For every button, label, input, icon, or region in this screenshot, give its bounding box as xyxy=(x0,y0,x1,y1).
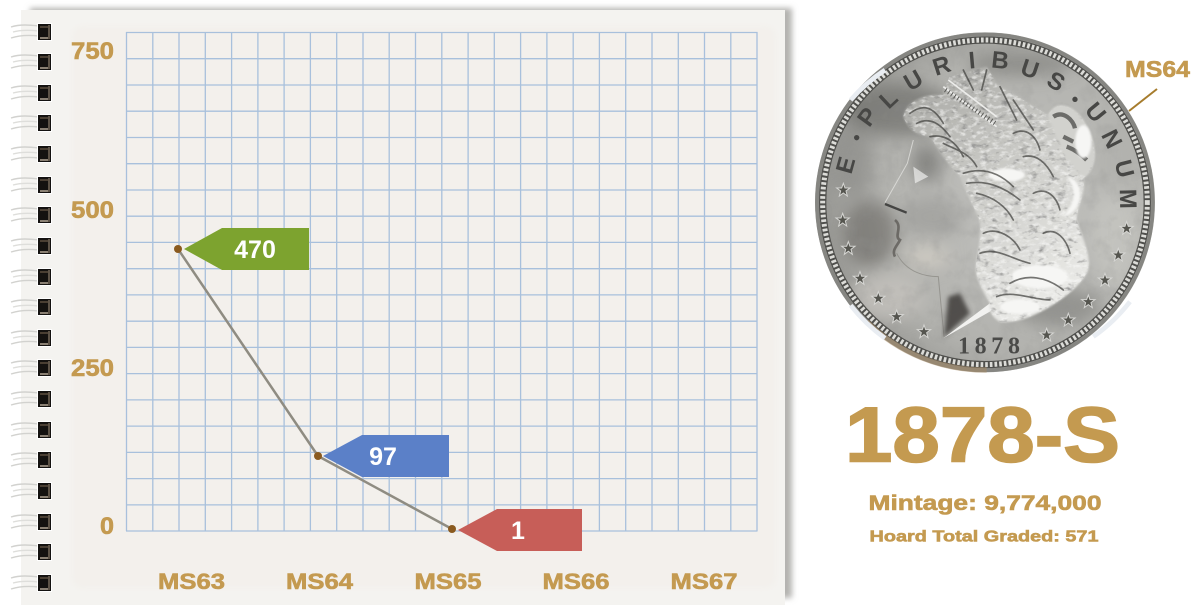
rim legend: N xyxy=(1095,126,1127,153)
hair grain texture xyxy=(900,63,1100,327)
coin body xyxy=(815,32,1155,372)
bust details xyxy=(885,140,994,338)
rim legend: E xyxy=(831,154,861,177)
rim legend xyxy=(831,47,1141,209)
bright highlights in hair xyxy=(988,125,1091,314)
spiral binding rings xyxy=(11,23,52,592)
y axis labels: 500 xyxy=(71,197,114,224)
x axis labels: MS67 xyxy=(670,569,738,594)
hoard total text: Hoard Total Graded: 571 xyxy=(870,528,1099,546)
rim legend: U xyxy=(1109,157,1139,181)
x axis labels: MS63 xyxy=(158,569,225,594)
tag: MS64 value 97: 97 xyxy=(369,443,397,471)
beaded rim xyxy=(817,34,1153,370)
x axis labels xyxy=(158,569,738,594)
stars xyxy=(836,183,1133,341)
y axis labels xyxy=(71,38,114,540)
rim legend: U xyxy=(1017,54,1042,85)
field tone patches xyxy=(836,44,1136,344)
rim legend: B xyxy=(990,47,1010,75)
rim legend: I xyxy=(967,47,976,75)
rim legend: M xyxy=(1114,189,1141,209)
tag: MS64 value 97 xyxy=(323,435,449,477)
x axis labels: MS66 xyxy=(542,569,610,594)
rim legend: S xyxy=(1042,66,1070,98)
rim legend: U xyxy=(899,65,928,97)
rim legend: P xyxy=(852,103,884,132)
paper shadow xyxy=(30,8,792,598)
cap bulge xyxy=(1048,106,1094,177)
x axis labels: MS65 xyxy=(414,569,482,594)
rim legend: U xyxy=(1079,97,1111,128)
holder notches xyxy=(851,70,1130,338)
coin grade label: MS64 xyxy=(1125,56,1190,82)
graph paper grid xyxy=(126,32,758,531)
coin grade label xyxy=(1125,56,1190,111)
data line xyxy=(178,249,452,529)
tag: MS63 value 470: 470 xyxy=(234,236,276,264)
hair mass xyxy=(903,67,1094,322)
tag: MS63 value 470 xyxy=(184,228,309,270)
grade pointer line xyxy=(1129,89,1157,111)
headband xyxy=(943,80,997,127)
x axis labels: MS64 xyxy=(286,569,354,594)
coin title: 1878-S xyxy=(845,390,1120,478)
y axis labels: 750 xyxy=(71,38,114,65)
coin illustration xyxy=(813,32,1157,373)
notebook panel xyxy=(21,8,792,605)
y axis labels: 0 xyxy=(100,513,114,540)
mintage text: Mintage: 9,774,000 xyxy=(868,492,1102,515)
rim legend: L xyxy=(874,85,903,114)
data points xyxy=(174,245,456,533)
hair strands xyxy=(910,70,1070,300)
tag: MS65 value 1: 1 xyxy=(511,517,525,545)
paper sheet xyxy=(21,10,785,605)
tag: MS65 value 1 xyxy=(458,509,582,551)
y axis labels: 250 xyxy=(71,355,114,382)
rim legend: R xyxy=(929,51,954,82)
date 1878: 1878 xyxy=(958,333,1025,359)
